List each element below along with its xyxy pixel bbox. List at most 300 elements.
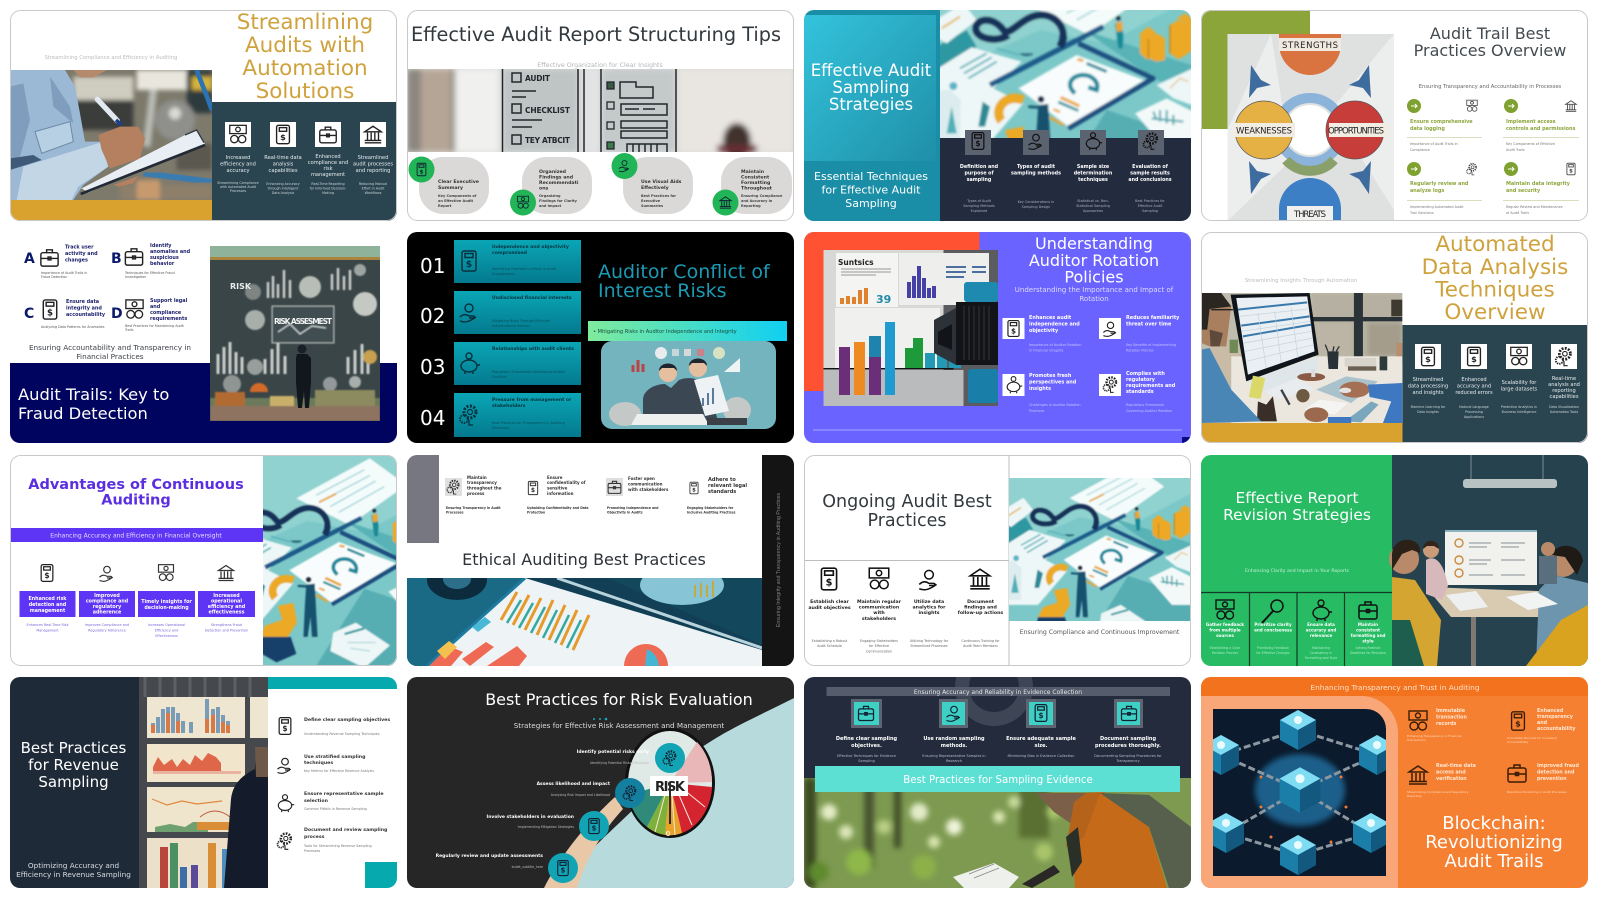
item: Maintain consistent formatting: formatting and [1351,633,1385,638]
item: Ensure confidentiality [527,475,588,514]
item 01 [420,240,581,283]
image: risk assessment chalkboard: RISK ASSESMEST [274,317,333,326]
item 04 [420,393,581,437]
teal top bar [268,677,397,689]
item: Gather feedback: Gather feedback [1206,622,1244,627]
step: Involve stakeholders: Involve stakeholders in evaluation [487,814,574,820]
feature: Enhanced accuracy: reduced errors [1455,390,1493,396]
item: Use random sampling methods: Use random sampling [923,736,985,742]
item 04: Pressure from management or [492,397,572,403]
panel: Automated Data Analysis Techniques Overview [1201,232,1588,443]
teal title block [804,15,936,161]
feature: Increased efficiency and accuracy: Processes [230,189,246,193]
item: Gather feedback: Revision Process [1212,651,1238,655]
step: Organized Findings: ons [539,186,549,192]
item: Improved fraud detection: prevention [1537,776,1567,782]
item: Immutable transaction records: records [1436,721,1457,727]
progress dots [593,718,607,720]
feature: Enhanced risk detection: Enhances Real-Time Risk [26,623,69,627]
item: Foster open communication: Promoting Independence and [607,506,659,510]
item: Reduces familiarity threat: Rotation Policies [1126,348,1154,352]
item A: changes [65,258,88,264]
step: Document findings: Audit Team Members [963,644,998,648]
panel: Auditor Conflict of Interest Risks [407,232,794,443]
item: Regularly review and analyze logs [1407,162,1482,215]
item: Complies with regulatory requirements [1099,371,1176,413]
step: Document findings: follow-up actions [958,610,1003,616]
item: Ensure comprehensive data logging: data logging [1410,126,1445,132]
feature: Definition and purpose: Definition and [960,164,999,170]
feature: Increased efficiency and accuracy: with Automated Audit [220,185,257,189]
panel: Audit Trails: Key to Fraud Detection [10,232,397,443]
item: Gather feedback [1206,600,1244,655]
item: Foster open communication: Objectivity in Audits [607,510,643,514]
photo: audit checklist on glass [408,69,793,152]
feature: Sample size determination: determination [1074,170,1113,176]
title: Interest Risks [598,280,727,302]
image: risk assessment chalkboard: RISK [230,282,252,291]
feature: Streamlined audit processes and reporting: Reducing Manual [359,182,387,186]
feature: Streamlined audit processes and reporting: Streamlined [358,155,388,161]
item: Maintain transparency: transparency [467,480,497,485]
item: Promotes fresh perspectives: Challenges in Auditor Rotation [1029,403,1081,407]
step: Involve stakeholders: Implementing Mitigation Strategies [518,825,574,829]
item: Promotes fresh perspectives: Promotes fresh [1029,373,1072,379]
title: Advantages of Continuous [28,477,244,493]
item: Maintain data integrity and security: Maintain data integrity [1506,181,1571,187]
step: Maintain regular communication: Maintain regular [857,599,902,605]
image: statistics charts with lens: Suntsics [838,258,874,267]
item A: Importance of Audit Trails in [41,271,87,275]
feature: Types of audit sampling methods: Sampling Design [1022,205,1050,209]
item: Reduces familiarity threat: Reduces familiarity [1126,315,1180,321]
title: Sampling [38,773,109,791]
item: Ensure representative sample selection: Common Pitfalls in Revenue Sampling [304,807,367,811]
item: Maintain consistent formatting: consistent [1356,628,1380,632]
item: Ensure data accuracy: relevance [1310,633,1332,638]
feature: Enhanced accuracy: Enhanced [1461,377,1487,383]
subtitle: Ensuring Accountability and Transparency in [29,343,191,352]
item 04: stakeholders [492,403,526,409]
feature: Streamlined audit processes and reporting [353,122,393,195]
item: Use stratified sampling techniques: techniques [304,760,333,766]
step: Involve stakeholders [487,811,609,841]
feature: Enhanced risk detection: management [30,608,66,614]
step: Establish clear objectives: audit objectives [808,605,851,611]
item: Reduces familiarity threat: threat over time [1126,322,1172,328]
dark feature panel [940,130,1191,221]
item: Enhances audit independence: independence and [1029,322,1080,328]
image: statistics charts with lens [824,250,998,406]
feature: Scalability: Scalability for [1502,380,1537,386]
item B: Identify [150,243,172,249]
title: Practices Overview [1414,41,1566,60]
item: Document sampling procedures: procedures thoroughly. [1095,743,1161,749]
item: Maintain consistent formatting: style [1362,638,1374,644]
title: Effective Report [1235,489,1359,507]
item: Define clear sampling objectives [836,699,898,763]
feature: Improved compliance: Regulatory Adherence [88,628,126,632]
item 02 [420,291,581,334]
step: Identify potential risks early [577,743,685,773]
item: Enhanced transparency: Immutable Records for Increased [1507,736,1557,740]
feature: Enhanced compliance and risk management [308,122,348,195]
item: Use stratified sampling techniques: Key Metrics for Effective Revenue Analysis [304,769,374,773]
feature: Evaluation of sample results [1128,130,1172,213]
feature: Timely insights: Increases Operational [148,623,185,627]
feature: Increased operational efficiency: Increased [213,593,240,599]
feature: Real-time analysis: Real-time [1552,376,1576,382]
illustration: two auditors reviewing reports [601,341,776,429]
illustration: SWOT diagram [1228,34,1394,220]
title: Understanding [1035,234,1153,253]
item: Ensure data accuracy: accuracy and [1306,628,1336,632]
feature: Increased efficiency and accuracy: efficiency and [220,162,256,168]
title: Revolutionizing [1425,832,1563,853]
item 01: Identifying Potential Conflicts in Audit [492,267,556,271]
feature: Real-time data analysis capabilities: analysis [273,162,294,168]
illustration: SWOT diagram: THREATS [1293,210,1326,220]
feature: Streamlined audit processes and reporting: Effort in Audit [362,186,385,190]
feature: Increased operational efficiency [198,566,255,632]
feature: Streamlined data processing [1408,344,1448,414]
feature: Enhanced accuracy: Natural Language [1459,405,1489,409]
item: Prioritize clarity: Prioritizing Feedback [1257,646,1289,650]
step: Maintain regular communication [857,568,902,654]
step: Maintain Consistent Formatting: Maintain [741,169,764,175]
item: Enhanced transparency: Accountability [1507,740,1529,744]
step: Organized Findings: Organizing [539,194,561,198]
image: blockchain cubes and chains [1213,709,1386,876]
item: Enhanced transparency: accountability [1537,726,1576,732]
item: Document and review sampling process: process [304,834,325,840]
feature: Enhanced compliance and risk management: Real-Time Reporting [311,182,345,186]
subtitle: Efficiency in Revenue Sampling [16,870,131,879]
step: Document findings: findings and [964,604,997,610]
item: Maintain consistent formatting: Deadlines for Revisions [1350,651,1386,655]
item B: B [111,251,122,267]
step: Maintain Consistent Formatting: Formatting [741,180,770,186]
feature: Streamlined data processing: Machine Learning for [1411,405,1446,409]
feature: Scalability [1501,344,1538,414]
item: Document sampling procedures: Transparency [1115,759,1140,763]
panel: Effective Audit Sampling Strategies [804,0,1207,221]
item: Define clear sampling objectives: Understanding Revenue Sampling Techniques [304,732,380,736]
feature: Increased efficiency and accuracy [217,122,259,193]
dark feature panel [212,102,397,221]
item: Ensure representative sample selection: Ensure representative sample [304,791,384,797]
subtitle: for Effective Audit [822,184,921,196]
item: Promotes fresh perspectives: Practices [1029,409,1045,413]
step: Use Visual Aids Effectively [612,153,693,214]
step: Establish clear objectives: Establishing a Robust [812,639,848,643]
item: Gather feedback: Establishing a Clear [1210,646,1241,650]
item: Define clear sampling objectives: Define clear sampling objectives [304,717,390,723]
title: Automated [1435,232,1555,257]
item: Maintain transparency [445,475,502,514]
feature: Enhanced compliance and risk management: for Informed Decision- [310,186,347,190]
item: Ensure data accuracy: Maintaining [1312,646,1330,650]
feature: Increased operational efficiency: Strengthens Fraud [211,623,242,627]
feature: Improved compliance [79,566,135,632]
item: Define clear sampling objectives: Define clear sampling [836,736,898,742]
feature: Definition and purpose: purpose of [964,170,994,176]
step: Document findings [958,569,1003,648]
item 04: 04 [420,406,445,430]
teal corner block [365,862,397,888]
item: Document and review sampling process: Tools for Streamlining Revenue Sampling [303,844,372,848]
item: Document and review sampling process [278,827,387,853]
step: Maintain regular communication: communication [859,604,899,610]
item D: Trails [124,328,134,332]
item: Immutable transaction records: transaction [1436,714,1467,720]
feature: Real-time data analysis capabilities [264,122,302,195]
step: Maintain Consistent Formatting: Ensuring Compliance [741,194,783,198]
item 01: compromised [492,250,527,256]
feature: Enhanced risk detection: Management [36,628,59,632]
feature: Scalability: large datasets [1501,386,1538,392]
feature: Increased efficiency and accuracy: accuracy [227,168,249,174]
feature: Evaluation of sample results: Effective Audit [1138,204,1163,208]
illustration: SWOT diagram: OPPORTUNITIES [1328,126,1384,136]
item: Improved fraud detection: Real-time Monitoring in Audit Processes [1507,790,1567,794]
item: Prioritize clarity: for Effective Changes [1256,651,1290,655]
subtitle: Enhancing Clarity and Impact in Your Reports [1245,568,1350,574]
item: Promotes fresh perspectives: perspectives and [1029,380,1077,386]
item: Maintain data integrity and security: and security [1506,188,1541,194]
feature: Improved compliance: Improves Compliance and [85,623,129,627]
feature: Real-time analysis: capabilities [1550,394,1579,400]
feature: Real-time data analysis capabilities: capabilities [269,168,298,174]
item: Ensure adequate sample size: Ensure adequate sample [1006,736,1076,742]
step: Maintain regular communication: stakeholders [862,616,896,622]
feature: Evaluation of sample results: and conclusions [1128,177,1172,183]
image: statistics charts with lens: 39 [876,293,891,306]
feature: Improved compliance: compliance and [86,598,129,604]
item: Enhanced transparency: transparency [1537,714,1574,720]
feature: Streamlined data processing: Data Insights [1417,410,1439,414]
gradient callout: • Mitigating Risks in Auditor Independence and Integrity [593,329,737,335]
subtitle: Optimizing Accuracy and [28,861,119,870]
subtitle: Streamlining Insights Through Automation [1245,278,1357,284]
feature: Timely insights [138,565,195,638]
item A: A [24,251,35,267]
title: Automation [242,56,368,81]
item A: Track user [65,244,94,250]
subtitle: Essential Techniques [814,170,928,183]
item: Prioritize clarity: Prioritize clarity [1254,622,1292,627]
feature: Definition and purpose: sampling [967,177,992,183]
photo: audit checklist on glass: AUDIT [525,74,551,83]
step: Organized Findings: Recommendati [539,180,579,186]
feature: Evaluation of sample results: Evaluation of [1132,164,1169,170]
item B [111,243,191,279]
title: Audit Trail Best [1430,24,1550,43]
risk gauge [625,728,715,838]
step: Assess likelihood and impact: Assess likelihood and impact [537,781,611,787]
panel: Effective Audit Report Structuring Tips [407,10,794,221]
item: Maintain data integrity and security: of Audit Trails [1506,211,1529,215]
item D: requirements [150,316,187,322]
item: Maintain data integrity and security [1503,162,1579,215]
subtitle band: Ensuring Accuracy and Reliability in Evidence Collection [914,689,1082,696]
panel: Best Practices for Revenue Sampling [10,677,397,888]
item D [111,298,188,332]
subtitle: Effective Organization for Clear Insights [537,62,663,69]
item 03: Relationships with audit clients [492,346,574,352]
item: Define clear sampling objectives: Effective Techniques for Evidence [837,754,896,758]
step: Utilize data analytics: Streamlined Processes [910,644,948,648]
panel: Effective Report Revision Strategies [1201,455,1588,666]
item: Adhere to standards: Adhere to [708,477,736,483]
feature: Sample size determination: techniques [1078,177,1108,183]
item: Gather feedback: sources [1216,633,1234,638]
item: Real-time data access: verification [1436,776,1467,782]
item C [24,299,106,329]
feature: Enhanced accuracy: Processing [1465,410,1483,414]
item: Implement access controls and permissions: Implement access [1506,119,1556,125]
item 03: 03 [420,355,445,379]
item D: compliance [150,310,182,316]
arm [544,797,623,888]
item: Ensure adequate sample size [1006,699,1076,758]
item: Enhances audit independence: Enhances audit [1029,315,1072,321]
item: Define clear sampling objectives: Sampling [858,759,875,763]
step: Organized Findings: Findings for Clarity [539,199,578,203]
photo: auditor writing on clipboard [11,70,212,200]
item: Improved fraud detection [1507,763,1579,794]
item: Maintain consistent formatting: Maintain [1358,622,1378,627]
step: Establish clear objectives [808,568,851,648]
navy footer band [10,363,397,443]
item: Ensure confidentiality: Ensure [547,475,563,480]
step: Establish clear objectives: Establish clear [810,599,850,605]
feature: Enhanced accuracy: accuracy and [1457,384,1491,390]
item: Ensure confidentiality: information [547,491,574,496]
item: Complies with regulatory requirements: Complies with [1126,371,1165,377]
item 01: Engagements [492,272,516,276]
subtitle: Understanding the Importance and Impact of [1015,286,1174,294]
dark feature panel [1402,325,1588,443]
feature: Increased operational efficiency: efficiency and [208,604,246,610]
item: Adhere to standards: relevant legal [708,483,747,489]
step: Utilize data analytics: analytics for [913,604,946,610]
item: Maintain consistent formatting [1350,602,1386,655]
feature: Types of audit sampling methods: Types of audit [1017,164,1056,170]
panel: Advantages of Continuous Auditing [10,444,449,679]
item: Document and review sampling process: Document and review sampling [304,827,387,833]
dark side bar [762,455,794,666]
item: Ensure representative sample selection [278,791,384,812]
step: Clear Executive Summary: Summary [438,185,463,191]
photo: man viewing chart wall [139,677,268,888]
title: Best Practices for Risk Evaluation [485,690,753,709]
item 03: Conflicts [492,375,507,379]
light blue curved background [554,698,794,888]
item: Maintain transparency: Processes [446,510,464,514]
title: Audit Trails: Key to [18,385,169,404]
title: Audit Trails [1444,851,1544,872]
illustration: isometric audit documents [1009,478,1190,621]
item D: and [150,304,161,310]
item: Ensure adequate sample size: size. [1035,743,1048,749]
feature: Sample size determination: Approaches [1083,209,1103,213]
photo: audit checklist on glass: TEY ATBCIT [525,136,571,145]
item: Ensure comprehensive data logging: Compliance [1410,148,1430,152]
feature: Enhanced risk detection: Enhanced risk [28,596,67,602]
feature: Real-time analysis: reporting [1552,388,1576,394]
item: Enhances audit independence: objectivity [1029,328,1059,334]
step: Use Visual Aids Effectively: Effectively [641,185,669,191]
subtitle: Ensuring Compliance and Continuous Improvement [1020,629,1180,636]
feature: Scalability: Predictive Analytics in [1501,405,1537,409]
item: Adhere to standards [687,477,747,514]
item: Prioritize clarity: and conciseness [1254,628,1292,632]
item: Complies with regulatory requirements: standards [1126,389,1154,395]
item: Foster open communication: with stakeholders [628,487,669,492]
item: Define clear sampling objectives: objectives. [851,743,882,749]
step: Maintain Consistent Formatting: Throughout [741,186,773,192]
item: Maintain transparency: process [467,491,485,496]
item: Define clear sampling objectives [279,717,390,736]
item: Implement access controls and permissions [1503,99,1579,152]
item: Reduces familiarity threat: Key Benefits of Implementing [1126,343,1176,347]
feature: Real-time analysis: analysis and [1548,382,1580,388]
step: Document findings: Document [967,599,995,605]
feature: Enhanced compliance and risk management: compliance and [308,160,348,166]
subtitle band: Enhancing Accuracy and Efficiency in Financial Oversight [50,532,222,540]
title: Auditing [101,492,171,508]
step: Regularly review assessments [436,853,578,883]
item A: Fraud Detection [41,275,67,279]
item: Improved fraud detection: Improved fraud [1537,763,1579,769]
feature: Types of audit sampling methods: sampling methods [1011,170,1061,176]
item: Ensure comprehensive data logging: Ensure comprehensive [1410,119,1473,125]
item: Regularly review and analyze logs: Trail Solutions [1409,211,1434,215]
feature: Improved compliance: Improved [94,593,120,599]
item: Reduces familiarity threat [1099,315,1180,352]
item 01: 01 [420,254,445,278]
item: Enhances audit independence: in Financial Integrity [1029,348,1063,352]
step: Maintain regular communication: Engaging Stakeholders [860,639,898,643]
item 02: Mitigating Risks Through Effective [492,319,550,323]
step: Clear Executive Summary: an Effective Audit [438,199,473,203]
item: Complies with regulatory requirements: Governing Auditor Rotation [1126,409,1172,413]
feature: Enhanced risk detection: detection and [29,602,67,608]
feature: Enhanced risk detection [20,565,76,632]
feature: Definition and purpose [960,130,999,213]
item: Promotes fresh perspectives [1002,373,1081,413]
feature: Enhanced accuracy: Applications [1464,415,1484,419]
illustration: isometric audit documents [940,10,1191,138]
item: Prioritize clarity [1254,600,1292,655]
step: Assess likelihood and impact: Analyzing Risk Impact and Likelihood [551,793,610,797]
item: Implement access controls and permissions: Key Components of Effective [1506,142,1555,146]
item: Regularly review and analyze logs: analyze logs [1410,188,1444,194]
feature: Definition and purpose: Sampling Methods [963,204,995,208]
feature: Evaluation of sample results: Best Practices for [1135,199,1165,203]
orange accent block [804,232,980,391]
item: Ensure data accuracy: Formatting and Style [1305,656,1337,660]
gold bar [1201,423,1402,443]
item: Ensure data accuracy [1305,600,1337,660]
step: Organized Findings: Organized [539,169,566,175]
subtitle: Ensuring Transparency and Accountability in Processes [1419,84,1562,90]
step: Organized Findings [510,157,592,216]
item B: behavior [150,261,175,267]
item 03: Regulatory Frameworks Addressing Auditor [492,370,566,374]
step: Identify potential risks early: Identify potential risks early [577,749,649,755]
